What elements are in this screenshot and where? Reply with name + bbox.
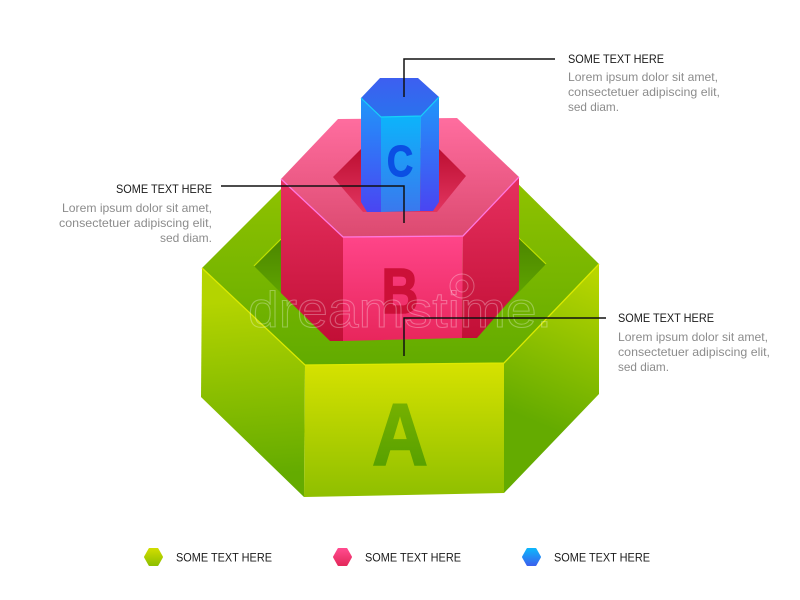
watermark: dreamstime.: [248, 282, 552, 338]
C right face: [420, 97, 439, 211]
leader line: C: [404, 59, 555, 97]
prism B: pink middle: [281, 118, 519, 341]
A right face: [504, 264, 599, 493]
B front face: [343, 236, 463, 341]
callout: B: SOME TEXT HERE: [116, 182, 212, 196]
legend: [145, 549, 650, 565]
callout: C: SOME TEXT HERE: [568, 52, 664, 66]
leader line: A: [404, 318, 606, 356]
B inner well: [333, 148, 466, 212]
B right face: [462, 177, 519, 338]
callout: A: consectetuer adipiscing elit,: [618, 345, 770, 359]
callout: B: sed diam.: [160, 231, 212, 245]
legend item B: SOME TEXT HERE: [365, 550, 461, 564]
legend item A: SOME TEXT HERE: [176, 550, 272, 564]
A inner well: [254, 238, 546, 312]
callout: C: sed diam.: [568, 100, 619, 114]
legend item B: [334, 549, 461, 565]
callout: C: [568, 52, 720, 114]
callout: C: consectetuer adipiscing elit,: [568, 85, 720, 99]
leader line: B: [221, 186, 404, 223]
C front face: [381, 116, 421, 212]
callout: C: Lorem ipsum dolor sit amet,: [568, 70, 718, 84]
callout: A: Lorem ipsum dolor sit amet,: [618, 330, 768, 344]
callout: B: [59, 182, 212, 245]
callout: B: consectetuer adipiscing elit,: [59, 216, 212, 230]
C top face: [361, 78, 439, 117]
B left face: [281, 179, 343, 341]
prism C: blue top: [361, 78, 439, 212]
legend item C: [523, 549, 650, 565]
letter C: C: [387, 137, 413, 186]
letter A: A: [372, 385, 428, 484]
legend item A: [145, 549, 272, 565]
A front face: [304, 363, 504, 497]
legend item C: SOME TEXT HERE: [554, 550, 650, 564]
A top face: [202, 166, 599, 365]
B top face: [281, 118, 519, 237]
callout: A: sed diam.: [618, 360, 669, 374]
C left face: [361, 98, 381, 212]
callout: A: [618, 311, 770, 374]
callout: B: Lorem ipsum dolor sit amet,: [62, 201, 212, 215]
prism A: green base: [201, 166, 599, 497]
callout: A: SOME TEXT HERE: [618, 311, 714, 325]
A left face: [201, 268, 305, 497]
letter B: B: [382, 255, 418, 327]
